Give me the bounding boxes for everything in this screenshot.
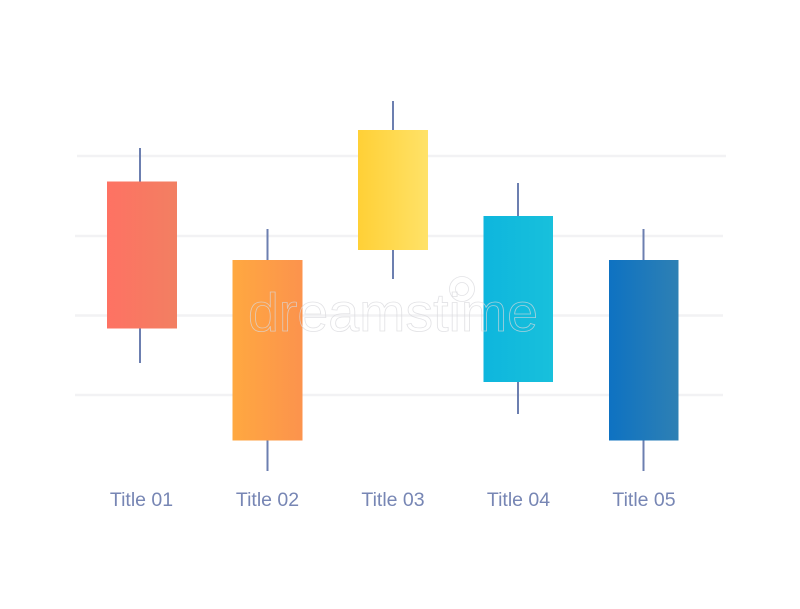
candle 4 — [484, 183, 553, 414]
label: Title 04: Title 04 — [487, 489, 550, 511]
candle 3 — [358, 101, 428, 279]
candle 5 — [609, 229, 678, 471]
candle 1 — [107, 148, 177, 363]
candle 2 — [232, 229, 302, 471]
label: Title 05: Title 05 — [612, 489, 676, 511]
watermark: dreamstime — [248, 283, 538, 343]
label: Title 01: Title 01 — [110, 489, 173, 511]
label: Title 03: Title 03 — [361, 489, 425, 511]
label: Title 02: Title 02 — [236, 489, 299, 511]
